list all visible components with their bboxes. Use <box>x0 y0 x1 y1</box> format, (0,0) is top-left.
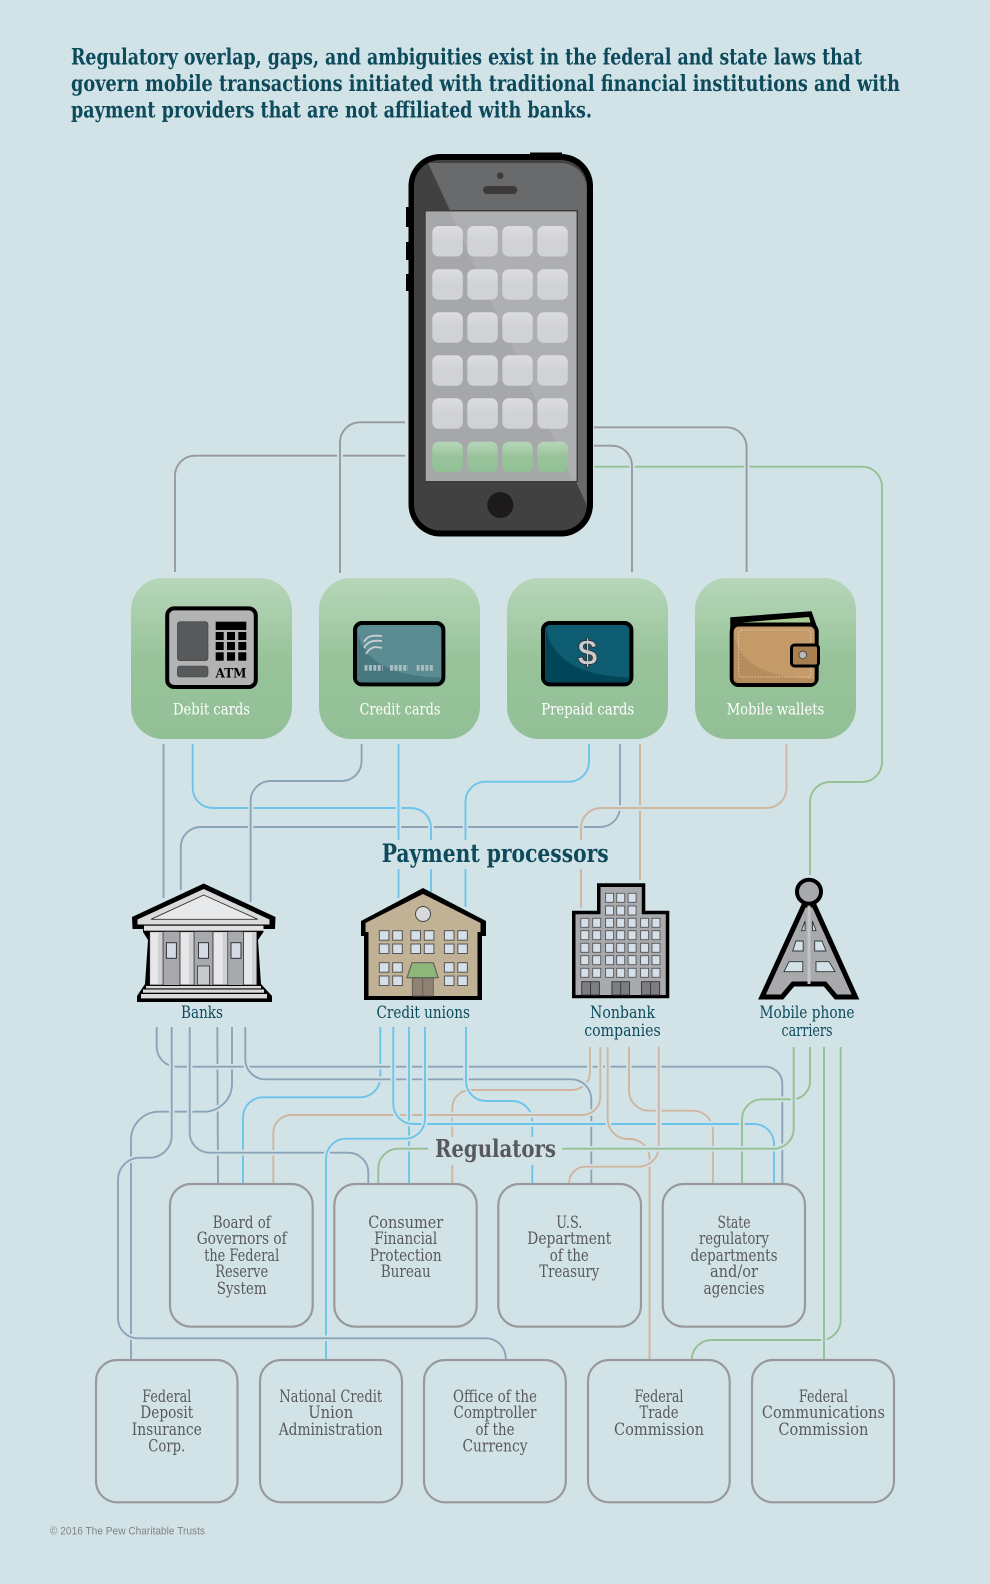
icon: credit union building <box>361 888 486 1000</box>
icon: bank <box>132 884 276 1002</box>
box: FTC <box>588 1360 730 1502</box>
label: Prepaid cards <box>541 700 634 718</box>
footer credit: © 2016 The Pew Charitable Trusts <box>50 1526 205 1538</box>
box: FTC: Federal <box>634 1387 684 1406</box>
box: U.S. Treasury: of the <box>550 1246 589 1265</box>
box: OCC: Currency <box>462 1436 528 1456</box>
box: Board of Governors: Board of <box>213 1213 272 1232</box>
icon: prepaid card <box>543 623 631 684</box>
box: Consumer Financial Protection Bureau: Financial <box>374 1229 437 1248</box>
icon: prepaid card: $ <box>577 632 598 673</box>
box: FTC: Trade <box>640 1403 678 1422</box>
box: U.S. Treasury <box>498 1184 641 1327</box>
label: banks: Banks <box>181 1003 223 1022</box>
panel: mobile wallets <box>695 578 856 739</box>
icon: ATM: ATM <box>215 666 246 682</box>
label: Credit cards <box>360 700 441 718</box>
connector lines: providers to regulators <box>118 1027 841 1360</box>
box: U.S. Treasury: Department <box>527 1229 612 1248</box>
panel: credit cards <box>319 578 480 739</box>
icon: mobile phone tower <box>762 880 856 997</box>
box: State regulators: regulatory <box>699 1229 770 1248</box>
box: Board of Governors: Governors of <box>197 1229 288 1248</box>
connector lines: products to providers <box>164 744 786 908</box>
speaker, camera, home button <box>483 186 517 194</box>
box: NCUA <box>260 1360 402 1502</box>
icon: nonbank office building <box>572 883 669 998</box>
box: State regulators: departments <box>690 1246 778 1265</box>
box: FCC <box>752 1360 894 1502</box>
box: OCC: of the <box>476 1420 514 1439</box>
phone side and top buttons <box>406 152 562 291</box>
box: Board of Governors: the Federal <box>204 1246 279 1265</box>
box: U.S. Treasury: U.S. <box>556 1213 582 1232</box>
phone screen <box>425 211 577 482</box>
box: Consumer Financial Protection Bureau <box>334 1184 477 1327</box>
box: Consumer Financial Protection Bureau: Consumer <box>368 1213 443 1232</box>
panel: debit cards <box>131 578 292 739</box>
box: FDIC: Corp. <box>148 1436 185 1456</box>
box: Board of Governors: System <box>217 1279 267 1298</box>
box: FCC: Federal <box>799 1387 848 1406</box>
box: Consumer Financial Protection Bureau: Protection <box>370 1246 442 1265</box>
box: OCC: Comptroller <box>454 1403 537 1422</box>
box: FTC: Commission <box>614 1420 704 1439</box>
box: OCC: Office of the <box>453 1387 537 1406</box>
label: Mobile wallets <box>727 700 824 718</box>
box: Consumer Financial Protection Bureau: Bureau <box>381 1262 431 1281</box>
phone body <box>408 154 593 536</box>
label: mobile phone carriers: Mobile phone <box>760 1003 854 1022</box>
icon: wallet <box>731 612 818 685</box>
box: NCUA: Administration <box>278 1420 383 1439</box>
title <box>71 44 900 124</box>
box: FDIC: Deposit <box>140 1403 194 1422</box>
heading: regulators: Regulators <box>435 1134 556 1163</box>
box: NCUA: National Credit <box>279 1387 382 1406</box>
box: FCC: Communications <box>762 1403 885 1422</box>
box: U.S. Treasury: Treasury <box>539 1262 600 1281</box>
label: nonbank companies <box>584 1003 661 1040</box>
title: payment providers that are not affiliated with banks. <box>71 98 592 124</box>
label: Debit cards <box>173 700 250 718</box>
box: Board of Governors: Reserve <box>215 1262 268 1281</box>
panel: prepaid cards <box>507 578 668 739</box>
icon: credit card <box>355 623 443 684</box>
label: mobile phone carriers <box>760 1003 854 1040</box>
label: nonbank companies: Nonbank <box>590 1003 656 1022</box>
connector lines: phone to payment products <box>175 422 882 875</box>
heading: payment processors: Payment processors <box>382 839 609 868</box>
box: OCC <box>424 1360 566 1502</box>
box: FDIC: Federal <box>142 1387 191 1406</box>
label: nonbank companies: companies <box>584 1021 661 1040</box>
box: FDIC: Insurance <box>132 1420 202 1439</box>
box: State regulators <box>663 1184 805 1327</box>
box: State regulators: State <box>718 1213 750 1232</box>
box: FCC: Commission <box>778 1420 869 1439</box>
icon: ATM <box>167 608 256 687</box>
app icons <box>432 226 568 429</box>
box: FDIC <box>96 1360 238 1502</box>
green app icons <box>432 442 568 472</box>
box: Board of Governors <box>170 1184 313 1327</box>
label: mobile phone carriers: carriers <box>782 1021 832 1040</box>
box: State regulators: agencies <box>704 1279 764 1298</box>
box: NCUA: Union <box>308 1403 354 1422</box>
label: credit unions: Credit unions <box>376 1003 470 1022</box>
phone illustration <box>406 152 593 536</box>
box: State regulators: and/or <box>710 1262 758 1281</box>
